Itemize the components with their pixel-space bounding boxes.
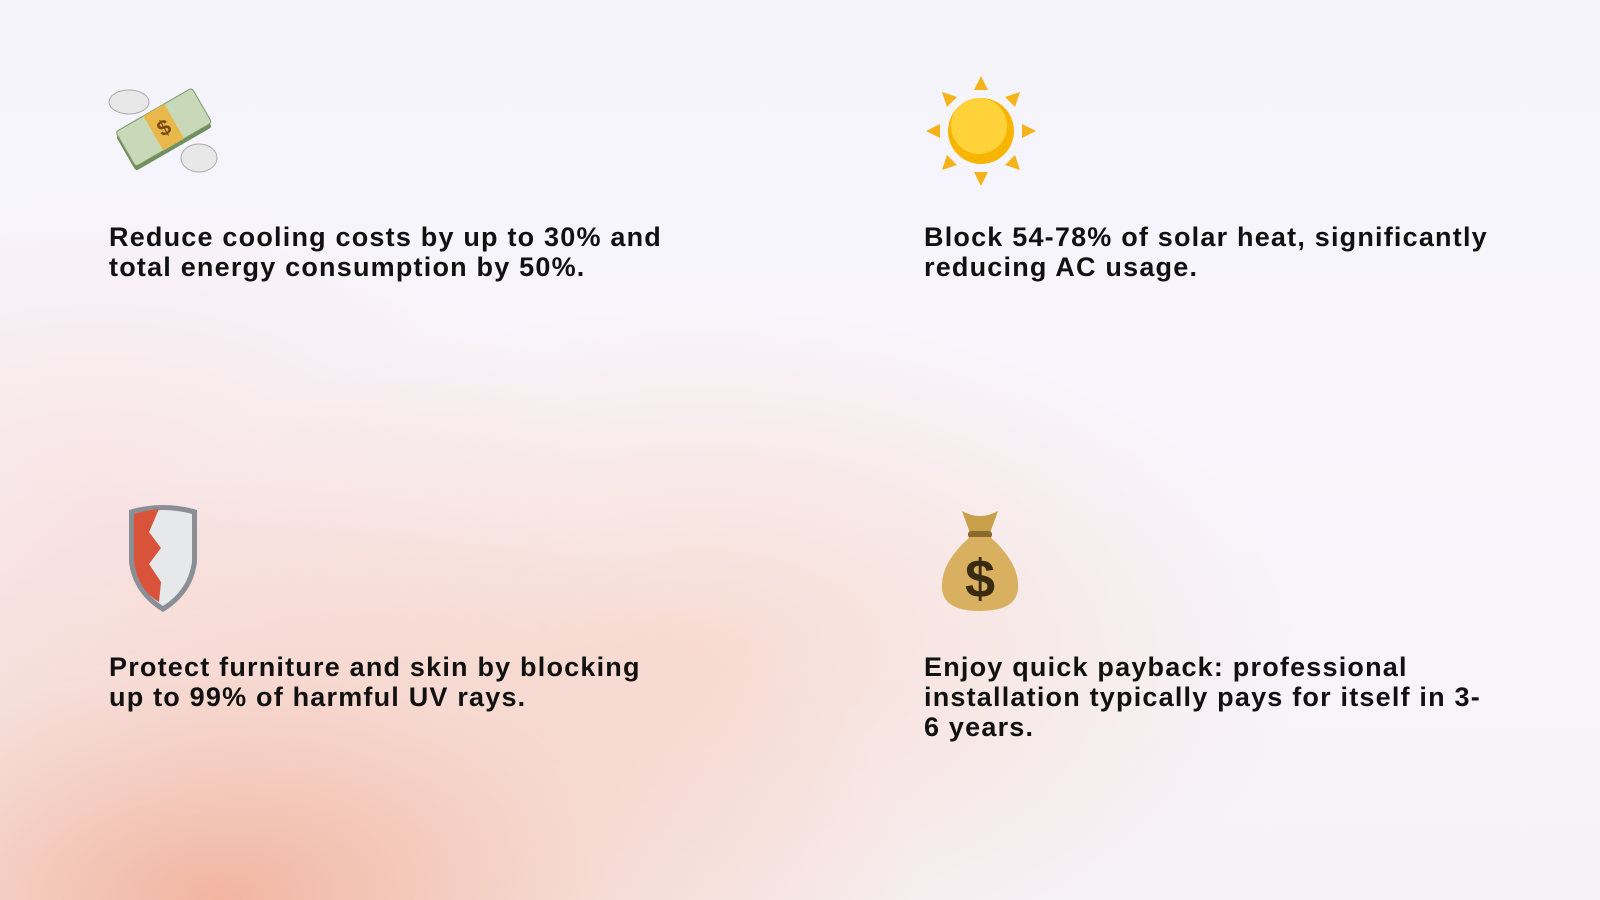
icon: money with wings: $ [152, 114, 176, 142]
icon: money bag: $ [965, 549, 995, 609]
text: cooling: total energy consumption by 50%. [109, 252, 585, 282]
text: payback: 6 years. [924, 712, 1034, 742]
panel: payback [924, 511, 1481, 742]
text: solar: reducing AC usage. [924, 252, 1198, 282]
icon: sun [926, 76, 1036, 186]
text: solar: Block 54-78% of solar heat, significantly [924, 222, 1488, 252]
icon: money bag [942, 511, 1018, 611]
text: payback: Enjoy quick payback: professional [924, 652, 1408, 682]
panel: solar heat [924, 76, 1488, 282]
text: UV: Protect furniture and skin by blocking [109, 652, 641, 682]
panel: cooling costs [108, 88, 662, 282]
icon: shield [129, 505, 197, 612]
text: cooling: Reduce cooling costs by up to 30% and [109, 222, 662, 252]
text: UV: up to 99% of harmful UV rays. [109, 682, 526, 712]
text: payback: installation typically pays for itself in 3- [924, 682, 1481, 712]
icon: money with wings [108, 88, 218, 172]
text: solar [924, 222, 1488, 282]
panel: UV protection [109, 505, 641, 712]
text: payback [924, 652, 1481, 742]
text: cooling [109, 222, 662, 282]
text: UV [109, 652, 641, 712]
